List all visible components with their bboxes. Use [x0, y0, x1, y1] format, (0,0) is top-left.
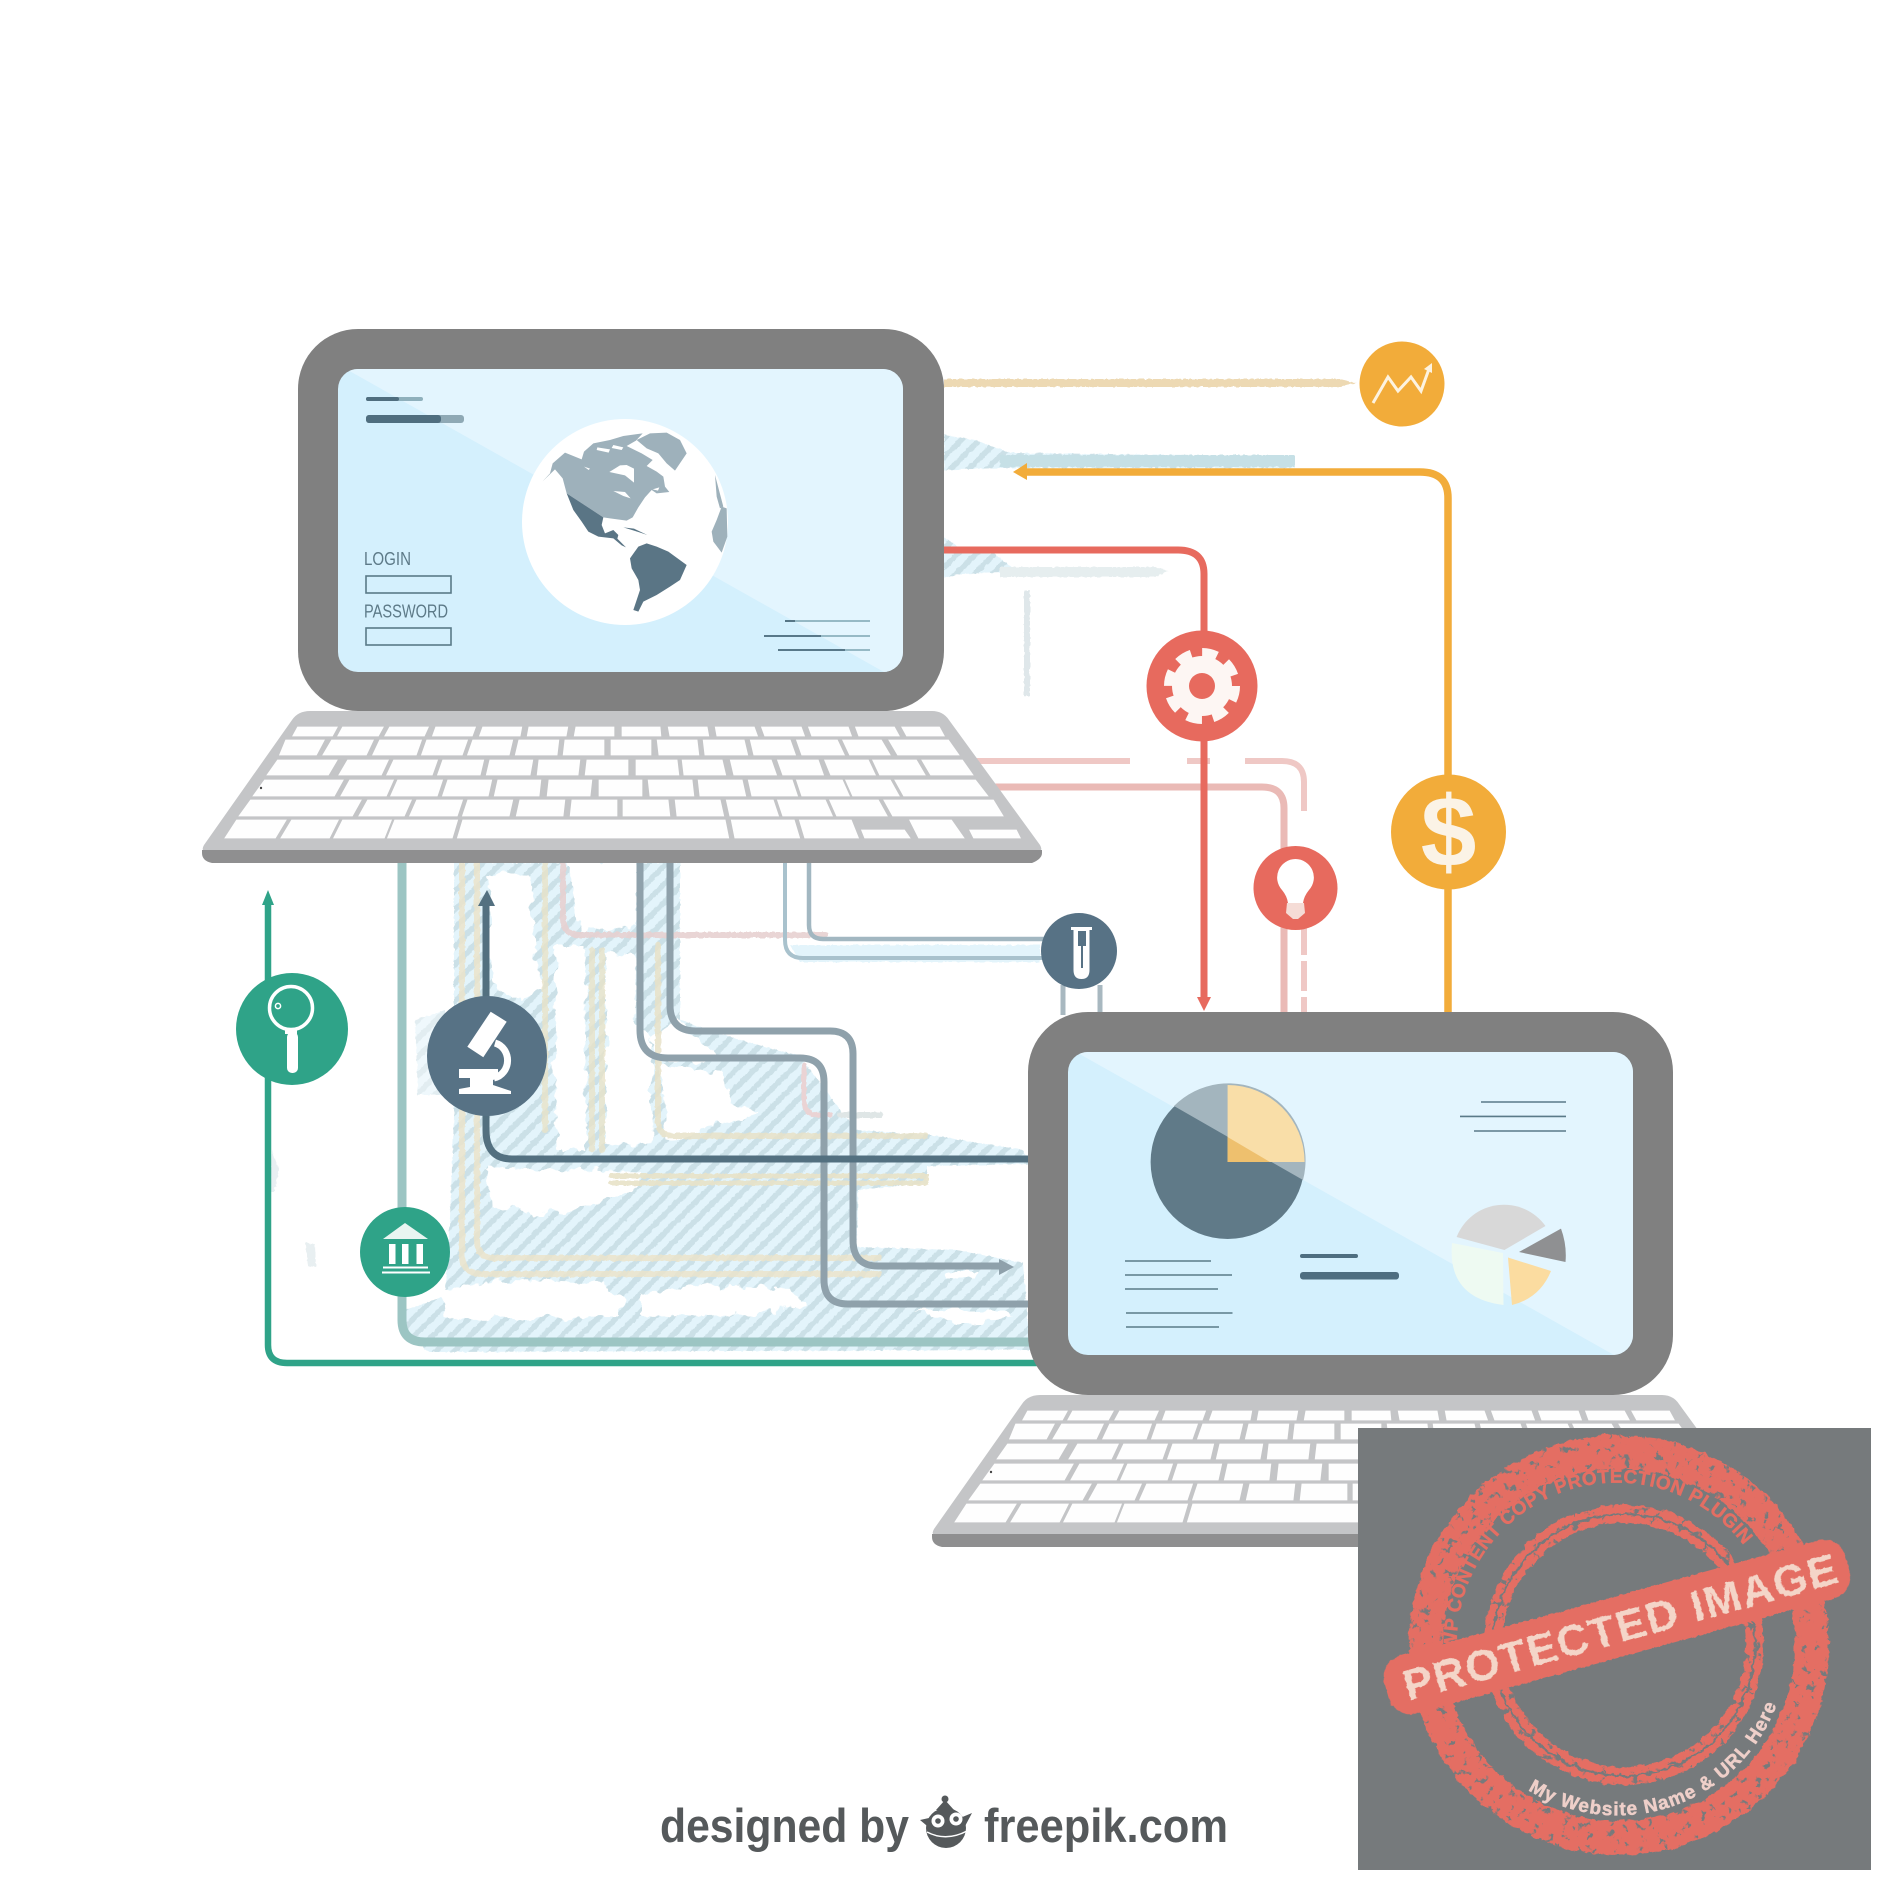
stamp ring text: WP CONTENT COPY PROTECTION PLUGIN — [1444, 1469, 1754, 1644]
hatched map background — [270, 435, 1295, 1352]
stamp inner ring — [1488, 1509, 1760, 1781]
credit: designed by freepik.com: freepik.com — [984, 1799, 1228, 1852]
icon: bank — [360, 1207, 450, 1297]
second keyboard: lower laptop — [932, 1395, 1772, 1547]
text lines upper right — [1460, 1102, 1566, 1131]
infographic canvas — [202, 329, 1871, 1870]
header bars — [366, 397, 464, 423]
arrow: orange line — [1013, 463, 1448, 1015]
text lines — [764, 621, 870, 650]
credit: designed by freepik.com: designed by — [660, 1799, 909, 1852]
password label: PASSWORD — [364, 602, 448, 622]
arrow: tan line to trend icon — [944, 379, 1356, 387]
arrow: pink line from laptop to lightbulb — [960, 787, 1284, 1015]
arrow: pale pink line to lightbulb — [960, 761, 1304, 1012]
login field — [366, 576, 451, 593]
watermark stamp — [1358, 1428, 1871, 1870]
large pie chart — [1151, 1083, 1306, 1239]
screen — [338, 369, 903, 672]
laptop screen: upper laptop — [298, 329, 944, 711]
login label: LOGIN — [364, 549, 411, 569]
credit: designed by freepik.com — [660, 1796, 1228, 1852]
arrow: test tube legs — [1063, 985, 1100, 1015]
screen — [1068, 1052, 1633, 1355]
stamp outer ring — [1426, 1452, 1812, 1838]
text lines lower left — [1125, 1261, 1232, 1327]
icon: freepik robot — [920, 1796, 972, 1848]
icon: magnifier — [236, 973, 348, 1085]
faint background connectors — [462, 862, 926, 1274]
arrow: gray line one — [640, 860, 1035, 1304]
password field — [366, 628, 451, 645]
icon: gear — [1146, 630, 1258, 742]
stamp band: PROTECTED IMAGE — [1398, 1545, 1843, 1711]
icon: lightbulb — [1254, 846, 1338, 930]
arrow: dark blue line — [478, 890, 1035, 1159]
frame — [298, 329, 944, 711]
arrow: second thin line to test tube — [809, 860, 1050, 939]
bars — [1300, 1254, 1399, 1280]
icon: trend chart — [1360, 342, 1444, 426]
frame — [1028, 1012, 1673, 1395]
arrow: thin line from keyboard to test tube — [785, 860, 1050, 958]
arrow: green line — [262, 890, 1050, 1363]
laptop screen: lower laptop — [1028, 1012, 1673, 1395]
keyboard: upper laptop — [202, 711, 1042, 863]
stamp url text: My Website Name & URL Here — [1528, 1702, 1776, 1816]
globe — [522, 419, 728, 625]
small exploded pie chart — [1452, 1205, 1566, 1305]
icon: microscope — [427, 996, 547, 1116]
stamp background — [1358, 1428, 1871, 1870]
icon: test tube — [1041, 913, 1117, 989]
icon: dollar — [1391, 774, 1506, 890]
arrow: red line — [940, 550, 1211, 1011]
icon: dollar: $ — [1421, 776, 1476, 888]
arrow: gray line two — [670, 860, 1014, 1275]
arrow: teal line — [402, 860, 1035, 1342]
white cut-outs of the hatched map — [442, 860, 1012, 1324]
